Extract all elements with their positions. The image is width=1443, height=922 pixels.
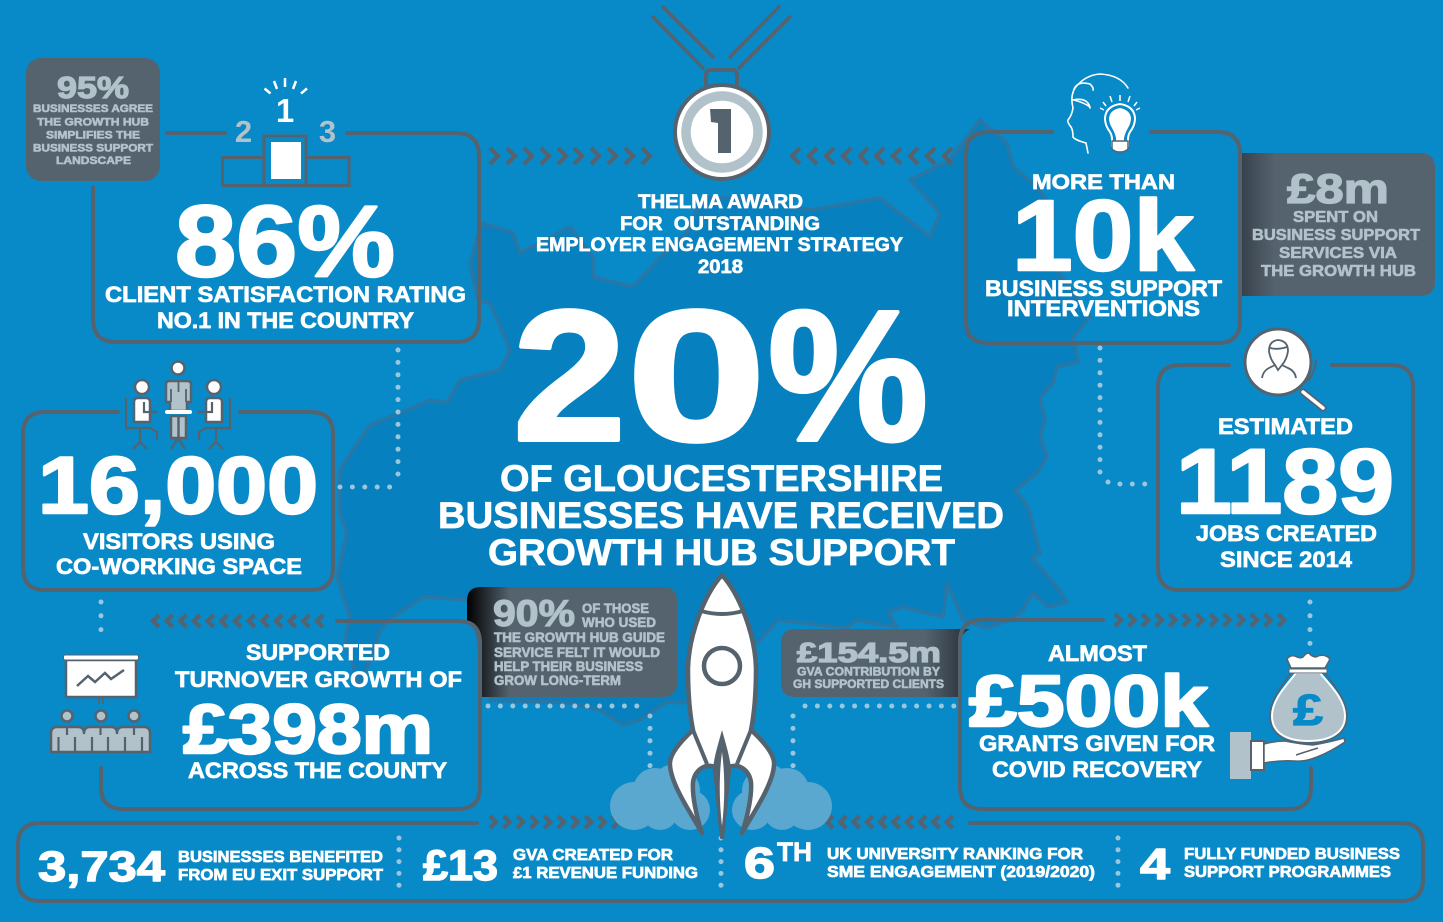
panel: 86% satisfaction: 86% <box>175 186 395 298</box>
stat: 3,734: BUSINESSES BENEFITED <box>178 849 383 866</box>
stat: £13 <box>423 842 698 890</box>
icon: presentation <box>51 655 150 752</box>
panel: £8m callout: SPENT ON <box>1293 209 1378 226</box>
stat: £13: £13 <box>423 842 498 890</box>
panel: 95% callout: SIMPLIFIES THE <box>46 130 140 142</box>
stat: 6th: TH <box>777 837 812 867</box>
stat: £13: £1 REVENUE FUNDING <box>513 865 698 882</box>
stat: 3,734 <box>38 843 384 891</box>
panel: jobs created: 1189 <box>1176 431 1394 533</box>
icon: head with lightbulb <box>1068 74 1140 153</box>
headline: 20%: GROWTH HUB SUPPORT <box>488 532 955 573</box>
panel: turnover growth: ACROSS THE COUNTY <box>188 758 447 783</box>
panel: 86% satisfaction: CLIENT SATISFACTION RATING <box>105 282 466 307</box>
panel: grants given: ALMOST <box>1048 641 1148 666</box>
panel: £154.5m callout: £154.5m <box>797 637 941 668</box>
chevrons: turnover panel <box>153 615 323 627</box>
panel: 10k interventions: MORE THAN <box>1032 170 1175 194</box>
stat: 4: FULLY FUNDED BUSINESS <box>1184 846 1400 863</box>
icon: meeting people <box>126 362 230 449</box>
headline: 20%: OF GLOUCESTERSHIRE <box>500 458 943 499</box>
text: Thelma award <box>536 191 903 278</box>
stat: 6th: 6 <box>744 839 775 888</box>
stat: 4: SUPPORT PROGRAMMES <box>1184 864 1391 881</box>
icon: magnifier with person <box>1245 329 1323 408</box>
panel: £8m callout <box>1240 153 1435 296</box>
chevrons: top right <box>792 148 952 164</box>
panel: jobs created <box>1158 329 1413 590</box>
panel: £8m callout: £8m <box>1287 165 1389 212</box>
headline: 20%: BUSINESSES HAVE RECEIVED <box>438 495 1004 536</box>
panel: £8m callout: THE GROWTH HUB <box>1261 263 1416 280</box>
icon: rocket <box>670 575 774 837</box>
chevrons: top left <box>490 148 650 164</box>
icon: podium: 3 <box>319 114 336 149</box>
icon: podium: 2 <box>235 114 252 149</box>
chevrons: bottom left <box>490 816 618 828</box>
text: Thelma award: THELMA AWARD <box>638 191 803 213</box>
panel: £154.5m callout: GH SUPPORTED CLIENTS <box>793 677 944 691</box>
stat: £13: GVA CREATED FOR <box>513 847 673 864</box>
panel: £154.5m callout <box>781 629 970 697</box>
stat: 3,734: FROM EU EXIT SUPPORT <box>178 867 384 884</box>
panel: 16,000 visitors: VISITORS USING <box>83 529 275 554</box>
chevrons: bottom right <box>827 816 953 828</box>
panel: turnover growth <box>51 621 480 809</box>
panel: 90% callout: 90% <box>493 593 575 634</box>
stat: 4: 4 <box>1140 840 1171 889</box>
panel: 90% callout <box>467 587 677 697</box>
icon: podium: 1 <box>276 92 294 129</box>
panel: grants given: £500k <box>969 662 1209 742</box>
panel: grants given: GRANTS GIVEN FOR <box>979 731 1215 756</box>
text: Thelma award: FOR OUTSTANDING <box>620 213 820 235</box>
stat: 6th: UK UNIVERSITY RANKING FOR <box>827 846 1083 863</box>
panel: bottom stats bar <box>18 823 1423 901</box>
panel: grants given <box>960 620 1347 809</box>
text: Thelma award: EMPLOYER ENGAGEMENT STRATEGY <box>536 234 903 256</box>
panel: turnover growth: SUPPORTED <box>246 640 390 665</box>
panel: 90% callout: WHO USED <box>582 615 656 630</box>
panel: grants given: COVID RECOVERY <box>992 757 1202 782</box>
panel: 95% callout: 95% <box>57 70 129 105</box>
stat: 6th: SME ENGAGEMENT (2019/2020) <box>827 864 1095 881</box>
stat: 4 <box>1140 840 1400 889</box>
panel: 95% callout: BUSINESS SUPPORT <box>33 142 153 154</box>
panel: 10k interventions: INTERVENTIONS <box>1007 296 1200 321</box>
panel: 95% callout: THE GROWTH HUB <box>37 116 149 128</box>
panel: 90% callout: SERVICE FELT IT WOULD <box>494 645 660 660</box>
icon: money bag on hand <box>1230 653 1347 779</box>
panel: jobs created: JOBS CREATED <box>1196 521 1377 546</box>
panel: £8m callout: BUSINESS SUPPORT <box>1252 227 1420 244</box>
headline: 20% <box>438 273 1004 573</box>
panel: 10k interventions <box>966 74 1240 343</box>
panel: turnover growth: £398m <box>183 690 433 768</box>
panel: 10k interventions: BUSINESS SUPPORT <box>985 276 1223 301</box>
county map outline <box>337 120 1090 725</box>
stat: 6th <box>744 837 1095 888</box>
icon: smoke clouds <box>610 765 832 830</box>
icon: medal <box>653 7 790 179</box>
panel: 86% satisfaction: NO.1 IN THE COUNTRY <box>157 308 414 333</box>
panel: £154.5m callout: GVA CONTRIBUTION BY <box>797 664 940 678</box>
panel: 90% callout: THE GROWTH HUB GUIDE <box>494 630 665 645</box>
panel: 95% callout: LANDSCAPE <box>56 155 131 167</box>
headline: 20%: 0 <box>627 273 766 480</box>
panel: 10k interventions: 10k <box>1012 180 1194 292</box>
panel: 95% callout <box>26 58 160 181</box>
connector dots <box>101 348 1310 886</box>
panel: 16,000 visitors: CO-WORKING SPACE <box>56 554 302 579</box>
panel: 90% callout: OF THOSE <box>582 601 649 616</box>
headline: 20%: % <box>768 273 928 480</box>
panel: 16,000 visitors: 16,000 <box>38 441 318 531</box>
headline: 20%: 2 <box>513 273 626 480</box>
panel: 90% callout: HELP THEIR BUSINESS <box>494 659 643 674</box>
stat: 3,734: 3,734 <box>38 843 165 891</box>
chevrons: grants panel <box>1115 614 1284 626</box>
panel: jobs created: SINCE 2014 <box>1220 547 1353 572</box>
text: Thelma award: 2018 <box>698 256 743 278</box>
panel: turnover growth: TURNOVER GROWTH OF <box>175 667 462 692</box>
panel: 90% callout: GROW LONG-TERM <box>494 673 621 688</box>
panel: 86% satisfaction <box>93 78 479 342</box>
icon: money bag on hand: £ <box>1293 686 1324 735</box>
panel: £8m callout: SERVICES VIA <box>1279 245 1397 262</box>
icon: podium <box>222 78 349 186</box>
panel: jobs created: ESTIMATED <box>1218 414 1353 439</box>
panel: 16,000 visitors <box>23 362 333 590</box>
panel: 95% callout: BUSINESSES AGREE <box>33 103 153 115</box>
